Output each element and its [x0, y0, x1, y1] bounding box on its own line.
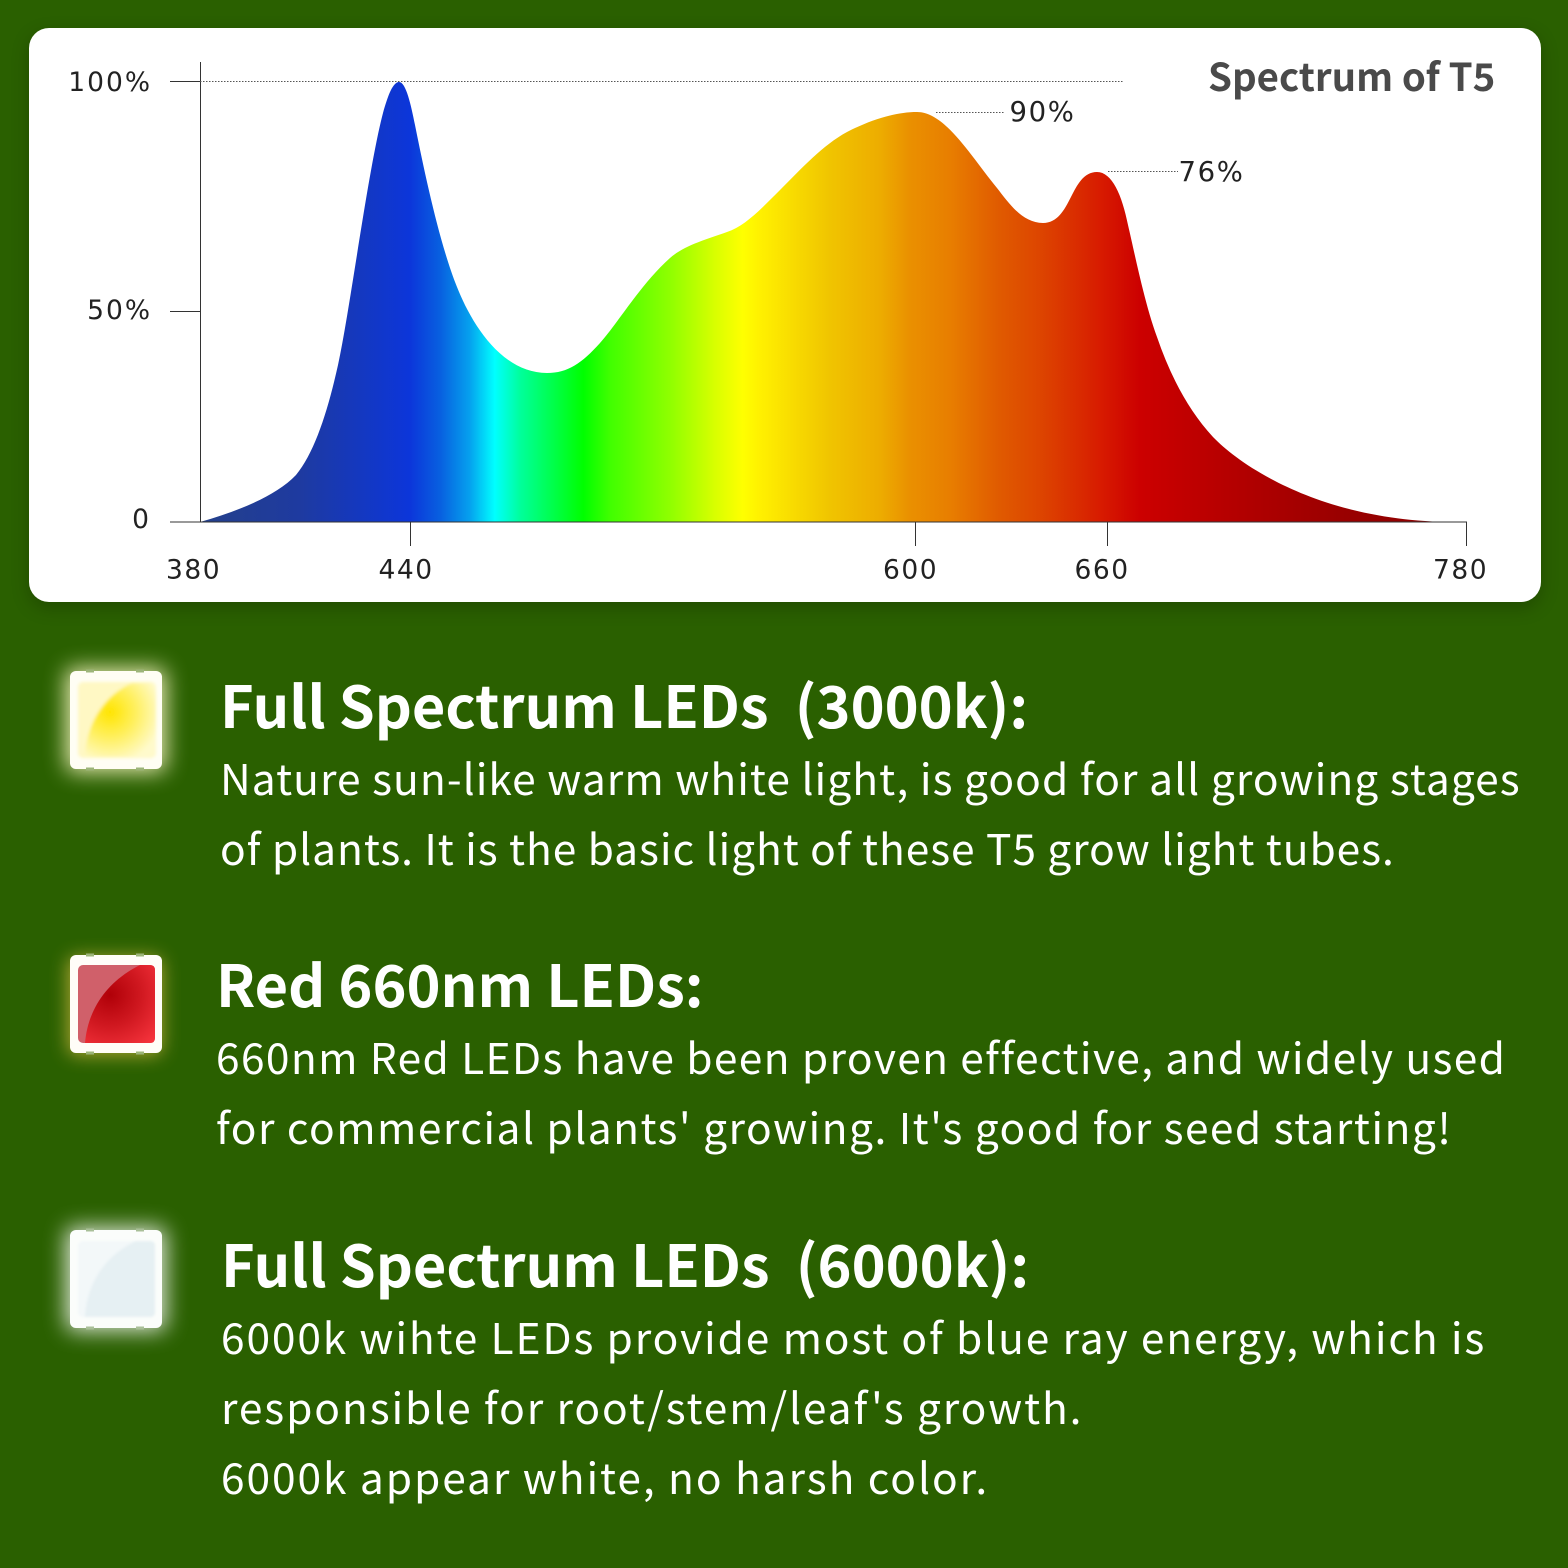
axes: [170, 62, 1467, 546]
icon: red LED: [55, 944, 175, 1068]
heading: Full Spectrum LEDs (6000k):: [221, 1220, 1029, 1304]
y axis labels: 50%: [87, 295, 152, 326]
icon: warm white LED: [48, 650, 184, 790]
x axis labels: 600: [883, 554, 938, 586]
peak labels: 76%: [1178, 156, 1244, 188]
heading: Full Spectrum LEDs (3000k):: [220, 661, 1028, 745]
panel: spectrum chart card: [29, 28, 1541, 602]
x axis labels: 780: [1433, 554, 1488, 586]
x axis labels: 380: [166, 554, 221, 586]
icon: cool white LED: [48, 1209, 184, 1349]
x axis labels: [166, 554, 1488, 586]
spectrum chart: [68, 47, 1495, 586]
description line 1: 660nm Red LEDs have been proven effective, and widely used: [216, 1026, 1506, 1087]
peak labels: [1010, 96, 1244, 188]
y axis labels: 0: [132, 504, 151, 535]
peak labels: 90%: [1010, 96, 1075, 128]
dotted guide lines: [200, 82, 1178, 172]
description line 2: responsible for root/stem/leaf's growth.: [221, 1376, 1083, 1437]
heading: Red 660nm LEDs:: [216, 940, 704, 1024]
x axis labels: 660: [1074, 554, 1130, 586]
y axis labels: [68, 67, 152, 535]
text block: full spectrum 6000k: [221, 1220, 1486, 1507]
x axis labels: 440: [378, 554, 434, 586]
description line 2: for commercial plants' growing. It's good for seed starting!: [216, 1096, 1452, 1157]
description line 1: Nature sun-like warm white light, is good for all growing stages: [220, 747, 1521, 808]
chart title: Spectrum of T5: [1208, 47, 1495, 103]
description line 2: of plants. It is the basic light of these T5 grow light tubes.: [220, 817, 1395, 878]
spectrum curve: [200, 82, 1465, 522]
y axis labels: 100%: [68, 67, 152, 98]
description line 3: 6000k appear white, no harsh color.: [221, 1446, 989, 1507]
description line 1: 6000k wihte LEDs provide most of blue ray energy, which is: [221, 1306, 1486, 1367]
text block: full spectrum 3000k: [220, 661, 1521, 878]
text block: red 660nm: [216, 940, 1506, 1157]
